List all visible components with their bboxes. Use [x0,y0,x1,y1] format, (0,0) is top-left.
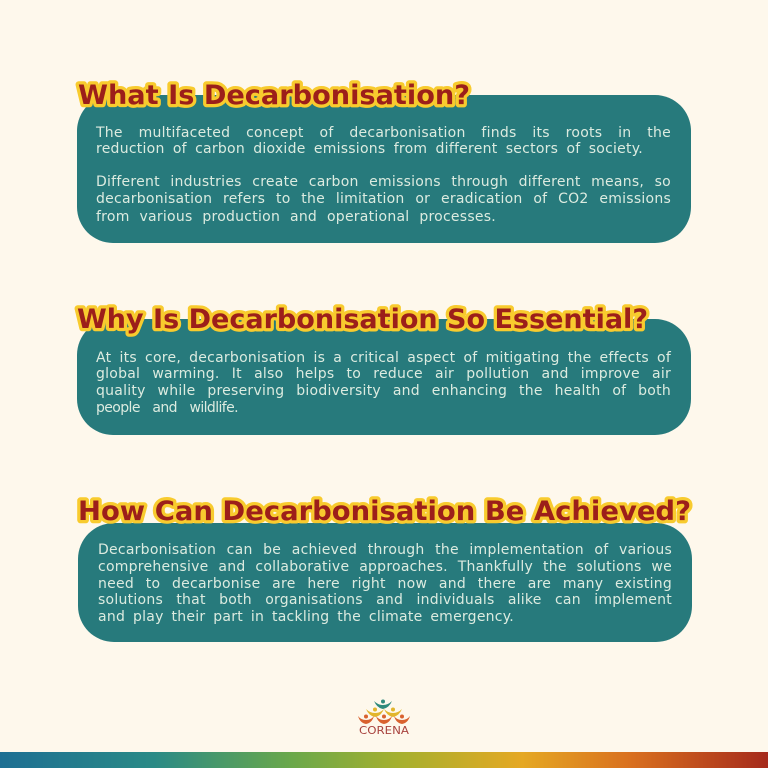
text block: how can decarbonisation be achieved: need to decarbonise are here right now and there are many existing [98,576,672,592]
footer gradient bar [0,752,768,768]
text block: what is decarbonisation [96,125,671,225]
logo: corena [358,700,410,737]
text block: what is decarbonisation: The multifaceted concept of decarbonisation finds its roots in the [96,125,671,141]
text block: how can decarbonisation be achieved: comprehensive and collaborative approaches. Thankfully the solutions we [98,559,672,575]
text block: how can decarbonisation be achieved: Decarbonisation can be achieved through the implementation of various [98,542,672,558]
heading: what is decarbonisation: What Is Decarbonisation? [78,80,470,111]
text block: why is decarbonisation essential: people and wildlife. [96,400,238,416]
text block: what is decarbonisation: reduction of carbon dioxide emissions from different sectors of society. [96,141,643,157]
icon: people pyramid [358,700,410,724]
text block: why is decarbonisation essential: global warming. It also helps to reduce air pollution and improve air [96,366,671,382]
text block: how can decarbonisation be achieved: solutions that both organisations and individuals alike can implement [98,592,672,608]
text block: what is decarbonisation: from various production and operational processes. [96,209,496,225]
text block: how can decarbonisation be achieved [98,542,672,625]
logo wordmark: CORENA [359,725,410,737]
panel: what is decarbonisation [77,95,691,243]
heading: why is decarbonisation essential: Why Is Decarbonisation So Essential? [77,304,648,335]
text block: what is decarbonisation: decarbonisation refers to the limitation or eradication of CO2 emissions [96,191,671,207]
text block: how can decarbonisation be achieved: and play their part in tackling the climate emergency. [98,609,514,625]
text block: why is decarbonisation essential: quality while preserving biodiversity and enhancing the health of both [96,383,671,399]
text block: why is decarbonisation essential: At its core, decarbonisation is a critical aspect of mitigating the effects of [96,350,671,366]
panel: why is decarbonisation essential [77,319,691,435]
heading: how can decarbonisation be achieved: How Can Decarbonisation Be Achieved? [78,496,691,527]
text block: why is decarbonisation essential [96,350,672,416]
panel: how can decarbonisation be achieved [78,523,692,642]
text block: what is decarbonisation: Different industries create carbon emissions through different means, so [96,174,671,190]
